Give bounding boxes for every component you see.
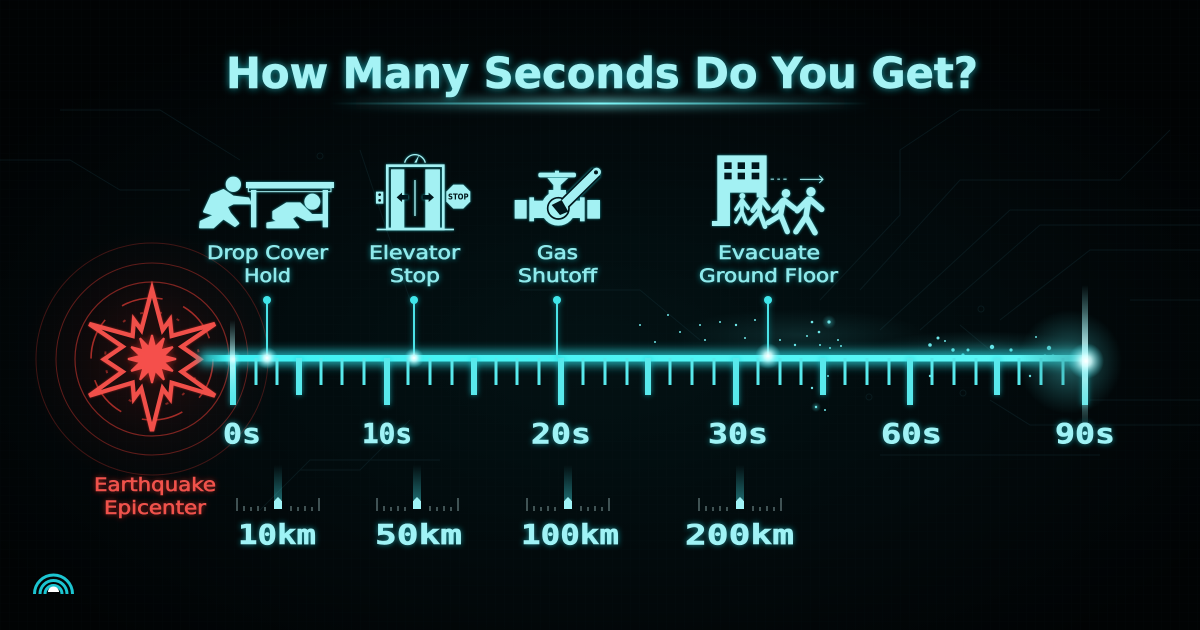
shock rings [36,243,268,475]
label: elevator stop [369,242,460,287]
epicenter burst [22,229,282,489]
start flare at 0s [224,320,242,400]
logo [34,575,72,594]
minor ticks [256,358,1063,385]
label: gas shutoff: Gas [537,242,578,264]
time labels: 10s [362,417,412,450]
distance scale: 50km [375,465,462,551]
distance scale: 50km: 50km [375,518,462,551]
label: elevator stop: Stop [390,265,440,287]
distance scale: 100km [521,465,619,551]
epicenter label: Epicenter [104,497,206,519]
pin: evacuate [764,296,772,358]
label: evacuate ground floor [699,242,838,287]
time labels: 60s [881,417,942,450]
end flare at 90s [1018,285,1122,430]
action labels [207,242,838,287]
inner star [128,335,176,383]
icon: elevator: STOP [448,193,469,202]
icon: drop cover hold [200,177,334,227]
sparks [639,309,1080,412]
pin markers [256,296,781,369]
time labels: 90s [1055,417,1115,450]
time labels [223,417,1115,450]
label: drop cover hold [207,242,328,287]
epicenter label [94,474,216,519]
label: evacuate ground floor: Evacuate [718,242,820,264]
outer star [89,289,215,431]
pin: gas shutoff [553,296,561,358]
label: gas shutoff [518,242,598,287]
distance scale: 10km [237,465,319,551]
timeline axis [200,351,1088,405]
label: gas shutoff: Shutoff [518,265,598,287]
pin: drop cover hold [263,296,271,358]
pin: elevator stop [410,296,418,358]
axis line [200,355,1085,362]
time labels: 20s [531,417,591,450]
distance scale: 100km: 100km [521,518,619,551]
time labels: 0s [223,417,261,450]
title underline [330,100,870,106]
label: drop cover hold: Drop Cover [207,242,328,264]
major ticks [230,358,1088,405]
label: evacuate ground floor: Ground Floor [699,265,838,287]
label: drop cover hold: Hold [244,265,291,287]
icon: elevator [376,155,470,230]
icon: gas valve [515,170,600,226]
label: elevator stop: Elevator [369,242,460,264]
time labels: 30s [708,417,768,450]
title: How Many Seconds Do You Get? [226,49,978,99]
distance scale: 10km: 10km [238,518,316,551]
epicenter label: Earthquake [94,474,216,496]
distance scale: 200km [685,465,794,551]
distance scale: 200km: 200km [685,518,794,551]
icon: evacuate [712,155,823,233]
